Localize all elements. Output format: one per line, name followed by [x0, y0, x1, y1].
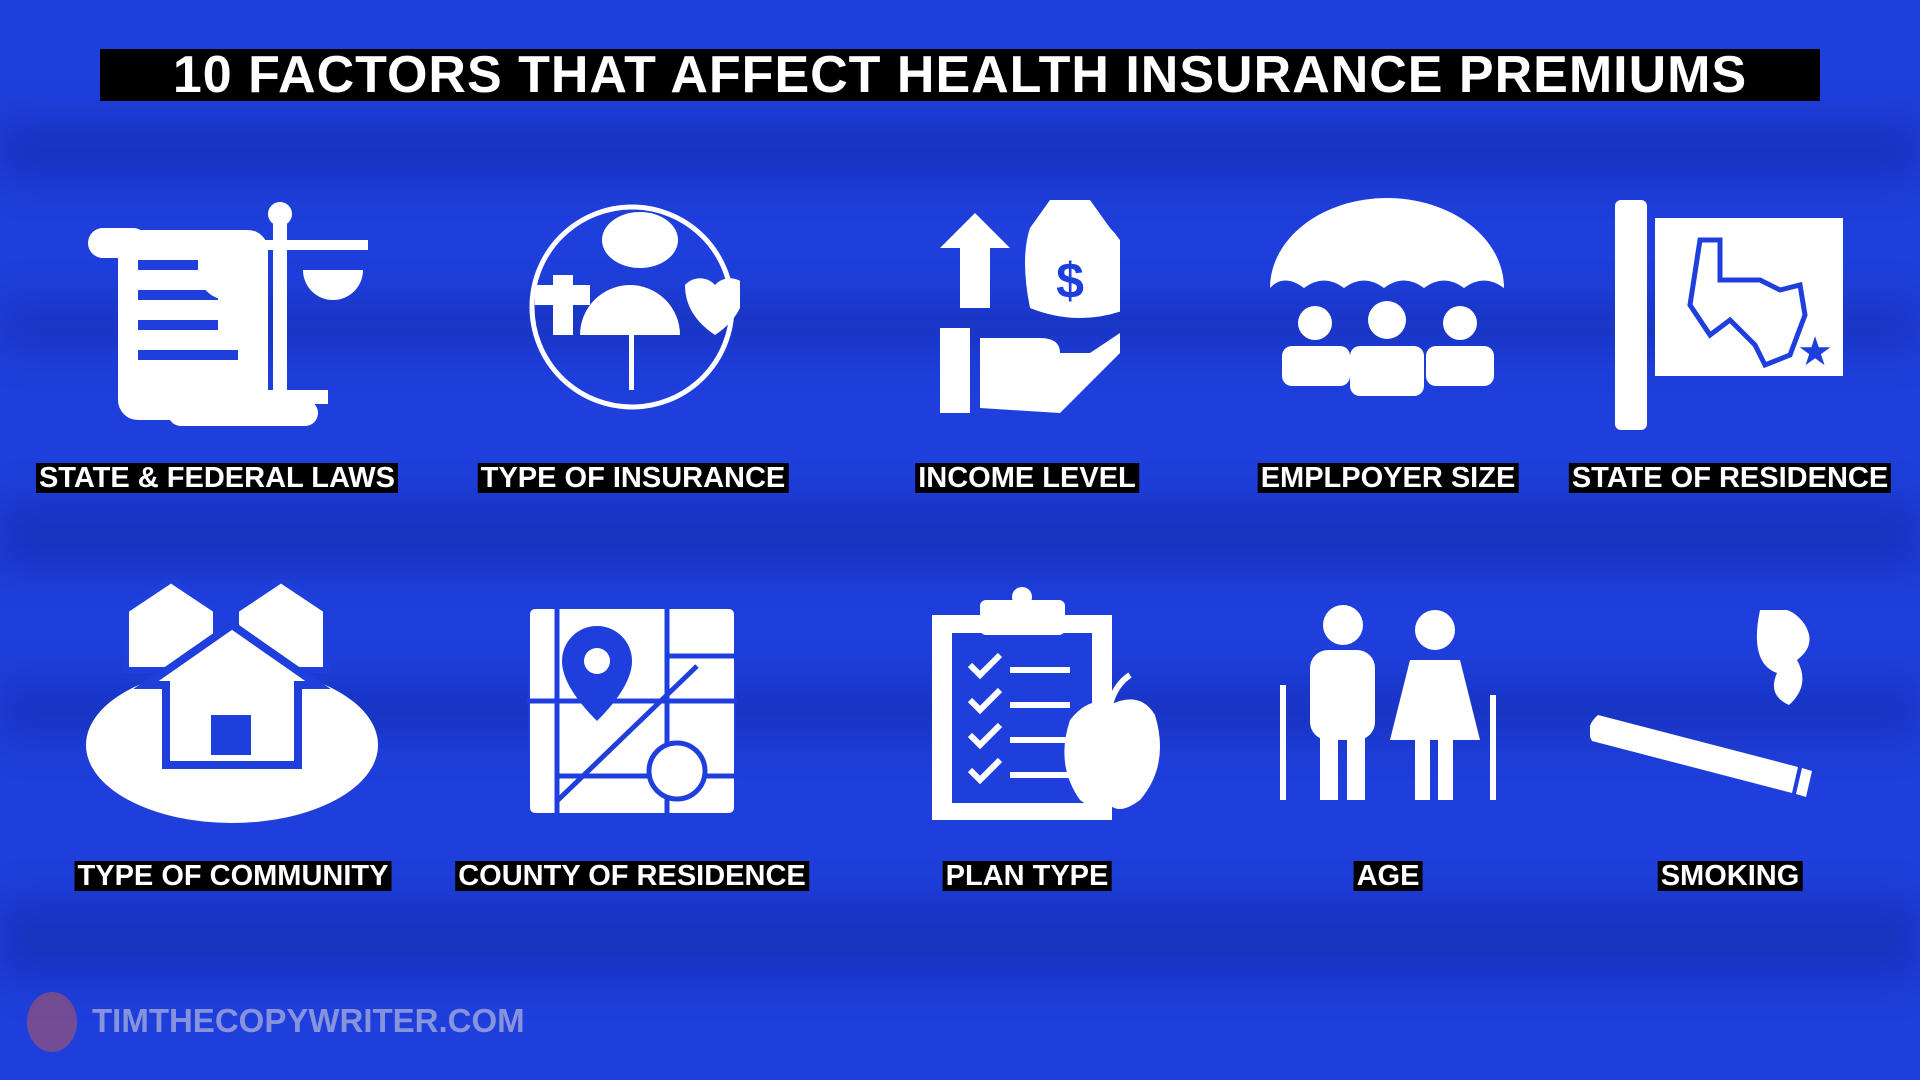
- text: SMOKING: [1661, 860, 1799, 892]
- labels row 2: TYPE OF COMMUNITY: [78, 860, 388, 892]
- labels row 1: STATE & FEDERAL LAWS: [39, 462, 395, 494]
- icon: elderly couple: [1280, 605, 1496, 800]
- icon: employer umbrella people: [1270, 198, 1504, 396]
- title: 10 FACTORS THAT AFFECT HEALTH INSURANCE PREMIUMS: [173, 46, 1747, 104]
- watermark: [27, 992, 525, 1052]
- icon: cigarette smoke: [1590, 610, 1812, 797]
- text: AGE: [1357, 860, 1419, 892]
- text: TYPE OF INSURANCE: [481, 462, 785, 494]
- text: EMPLPOYER SIZE: [1261, 462, 1515, 494]
- icon: community houses: [86, 584, 378, 823]
- icon: scales & scroll: [88, 202, 368, 426]
- icon: texas flag: ★: [1797, 330, 1833, 374]
- icon: income hand: [940, 200, 1120, 413]
- icon: clipboard apple: [932, 587, 1160, 820]
- icon: texas flag: [1615, 200, 1843, 430]
- text: PLAN TYPE: [946, 860, 1108, 892]
- text: INCOME LEVEL: [918, 462, 1136, 494]
- watermark: TIMTHECOPYWRITER.COM: [92, 1002, 525, 1039]
- text: COUNTY OF RESIDENCE: [458, 860, 806, 892]
- text: STATE OF RESIDENCE: [1572, 462, 1888, 494]
- icon: income hand: $: [1056, 253, 1084, 309]
- icon: county map: [527, 609, 737, 813]
- icon: insurance circle: [530, 204, 740, 410]
